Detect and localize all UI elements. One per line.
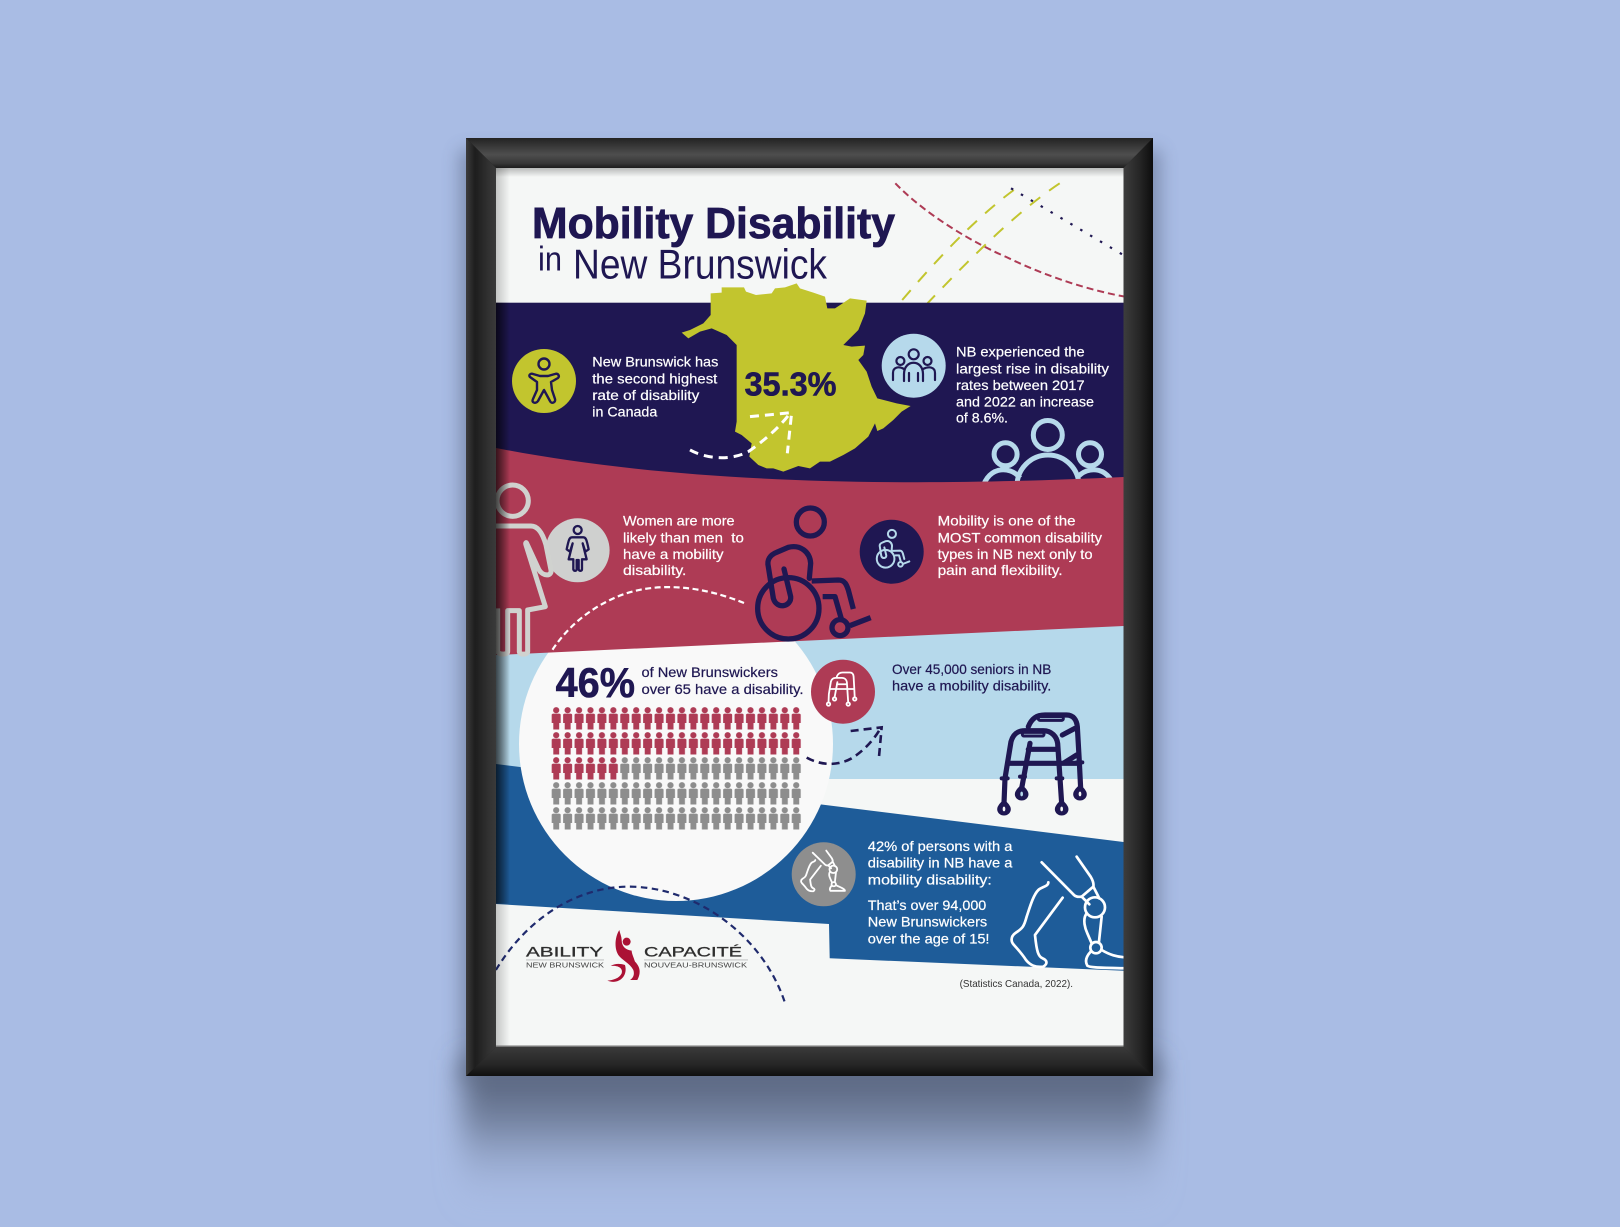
title: New Brunswick xyxy=(573,240,828,288)
text: over 45,000 seniors: have a mobility disability. xyxy=(892,679,1051,694)
icon: New Brunswick map xyxy=(682,283,911,472)
text: second highest rate: in Canada xyxy=(592,405,658,420)
text: women more likely: Women are more xyxy=(623,514,735,529)
text: 42 percent: 42% of persons with a xyxy=(868,839,1013,854)
logo: Ability New Brunswick: NOUVEAU-BRUNSWICK xyxy=(644,960,747,969)
panel: dark blue band xyxy=(496,764,1124,971)
text: second highest rate: New Brunswick has xyxy=(592,355,719,370)
text: mobility most common: types in NB next only to xyxy=(938,547,1093,562)
arrow: navy dashed xyxy=(807,727,882,764)
text: second highest rate: rate of disability xyxy=(592,388,700,403)
text: over 45,000 seniors: Over 45,000 seniors in NB xyxy=(892,662,1051,677)
stat: 46%: 46% xyxy=(556,659,635,706)
text: second highest rate: the second highest xyxy=(592,371,718,386)
text: mobility most common: pain and flexibility. xyxy=(938,563,1063,578)
panel: red band xyxy=(496,448,1124,655)
text: mobility most common xyxy=(938,514,1102,578)
panel: navy band xyxy=(496,303,1124,493)
title: Mobility Disability xyxy=(532,199,896,248)
logo: Ability New Brunswick: CAPACITÉ xyxy=(644,944,742,960)
chart: pictogram grid of people xyxy=(551,707,802,832)
text: women more likely xyxy=(623,514,744,578)
icon: person in yellow circle xyxy=(512,349,576,413)
icon: large woman outline xyxy=(494,485,551,654)
text: 42 percent: mobility disability: xyxy=(868,872,992,887)
logo: Ability New Brunswick: NEW BRUNSWICK xyxy=(526,960,604,969)
arrow: white dashed arc xyxy=(551,587,744,652)
text: largest rise: largest rise in disability xyxy=(956,361,1109,376)
icon: small leg circle xyxy=(792,842,856,906)
logo: Ability New Brunswick: ABILITY xyxy=(526,944,604,960)
text: largest rise: and 2022 an increase xyxy=(956,395,1094,410)
text: over 65 xyxy=(642,665,804,697)
panel: light blue band xyxy=(496,620,1124,779)
text: over 65: over 65 have a disability. xyxy=(642,682,804,697)
text: women more likely: disability. xyxy=(623,563,686,578)
icon: woman circle xyxy=(546,518,610,582)
citation: (Statistics Canada, 2022). xyxy=(960,978,1073,990)
picture frame xyxy=(466,138,1153,1076)
text: largest rise: of 8.6%. xyxy=(956,411,1008,426)
text: largest rise xyxy=(956,345,1109,426)
arc: navy dashed xyxy=(496,887,785,1003)
poster xyxy=(494,168,1125,1047)
text: over 65: of New Brunswickers xyxy=(642,665,778,680)
logo: Ability New Brunswick xyxy=(526,930,748,982)
text: women more likely: have a mobility xyxy=(623,547,724,562)
text: largest rise: NB experienced the xyxy=(956,345,1085,360)
frame drop shadow xyxy=(460,150,1160,1210)
icon: small walker circle xyxy=(811,660,875,724)
icon: large wheelchair xyxy=(758,508,871,639)
text: mobility most common: MOST common disability xyxy=(938,530,1102,545)
text: 42 percent xyxy=(868,839,1013,946)
text: mobility most common: Mobility is one of the xyxy=(938,514,1076,529)
icon: large prosthetic leg xyxy=(1012,857,1125,968)
stat: 35.3%: 35.3% xyxy=(744,366,836,402)
decorative dashed lines top right xyxy=(895,183,1125,303)
title xyxy=(534,206,896,279)
panel: white circle xyxy=(519,641,833,901)
text: 42 percent: disability in NB have a xyxy=(868,856,1013,871)
text: largest rise: rates between 2017 xyxy=(956,378,1085,393)
title: in xyxy=(538,240,562,278)
text: 42 percent: over the age of 15! xyxy=(868,931,990,946)
icon: large people outline xyxy=(982,418,1112,482)
text: 42 percent: That’s over 94,000 xyxy=(868,898,987,913)
text: women more likely: likely than men to xyxy=(623,530,744,545)
icon: large walker xyxy=(998,715,1086,815)
arrow: white dashed xyxy=(690,413,792,458)
icon: small wheelchair circle xyxy=(860,520,924,584)
text: 42 percent: New Brunswickers xyxy=(868,915,987,930)
text: second highest rate xyxy=(592,355,719,420)
icon: three people in blue circle xyxy=(882,334,946,398)
text: over 45,000 seniors xyxy=(892,662,1051,694)
